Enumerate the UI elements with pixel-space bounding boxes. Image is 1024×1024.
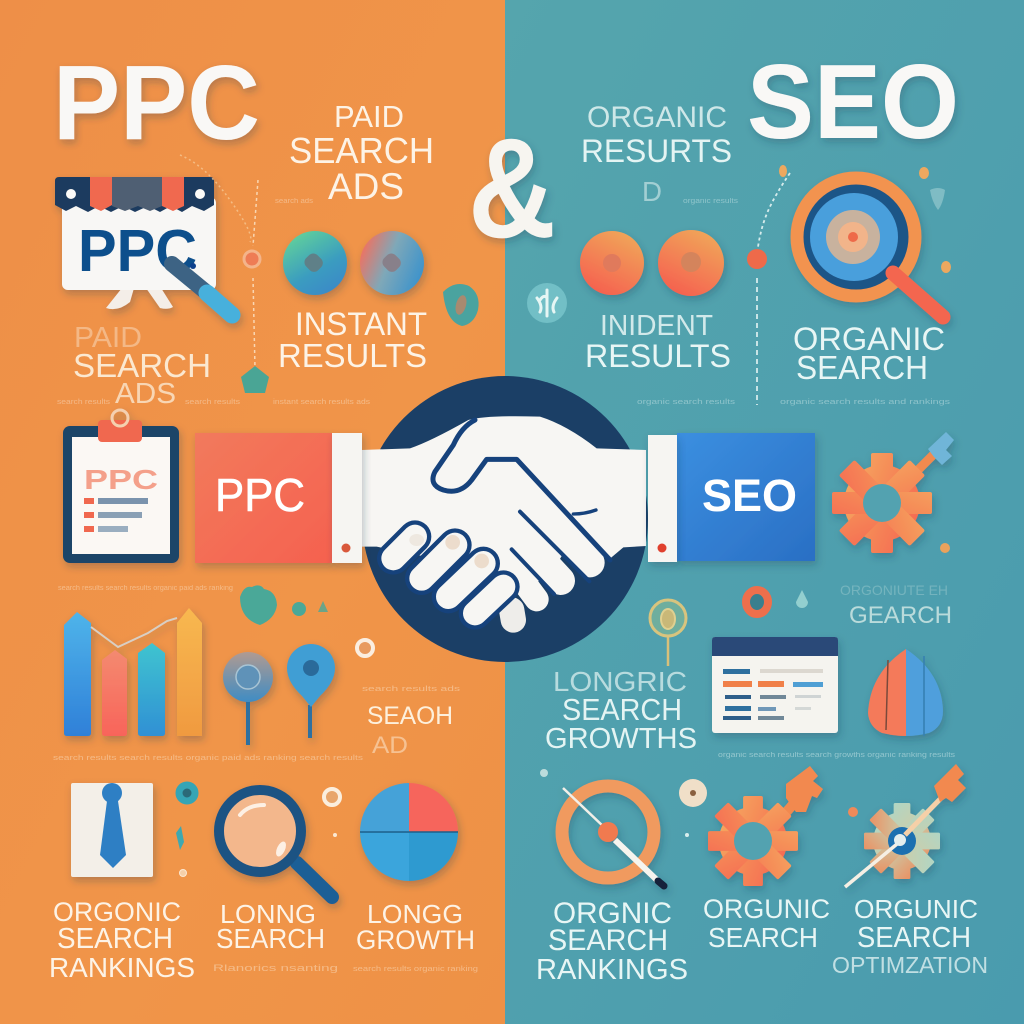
text: organic search faded right: ORGONIUTE EH (840, 582, 948, 598)
icon: small dot right (940, 543, 950, 553)
icon: tie card (71, 783, 153, 877)
icon: small accents left bottom (176, 826, 337, 876)
icon: multicolour circle (360, 231, 424, 295)
text: long organic growths: SEARCH (562, 692, 682, 727)
decoration: faint text rows left: search results organic ranking (353, 966, 478, 973)
icon: small ring left (357, 640, 373, 656)
text: long growth: GROWTH (356, 925, 475, 955)
icon: small target left (244, 251, 260, 267)
text: orgunic search: ORGUNIC (703, 894, 830, 924)
text: faint caption rows top: organic results (683, 198, 739, 205)
icon: small teal ring (179, 785, 195, 801)
text: organic search rankings right: RANKINGS (536, 954, 688, 986)
decoration: right dashed connector (757, 173, 790, 405)
text: faint caption rows top: organic search results and rankings (780, 399, 951, 406)
icon: gear key middle (708, 766, 823, 886)
icon: PPC billboard (55, 177, 232, 315)
text: incident results (585, 310, 731, 374)
icon: dial gauge (562, 786, 664, 886)
text: long organic growths: LONGRIC (553, 666, 687, 697)
text: instant results: RESULTS (278, 337, 427, 374)
text: organic search optimization (832, 894, 988, 978)
icon: small target right (747, 249, 767, 269)
icon: drop small (796, 590, 808, 608)
text: organic search rankings right: ORGNIC (553, 897, 672, 930)
text: paid search ads top: SEARCH (289, 130, 434, 171)
text: organic search optimization: ORGUNIC (854, 894, 978, 924)
text: long growth: LONGG (367, 899, 463, 929)
text: organic results top: RESURTS (581, 133, 732, 169)
text: organic search rankings right (536, 897, 688, 986)
decoration: faint divider right: organic search results search growths organic ranking results (718, 752, 956, 759)
title: SEO: SEO (747, 43, 959, 161)
icon: gear key right (845, 764, 966, 887)
text: faint caption rows top (57, 198, 951, 406)
icon: shield shape (868, 649, 943, 736)
icon: small accents top right (779, 165, 951, 273)
decoration: faint text rows left: search results search results organic paid ads ranking search results (53, 755, 364, 762)
icon: clipboard (63, 410, 179, 563)
text: long organic growths (545, 666, 697, 755)
icon: bar chart (64, 608, 202, 736)
text: organic search rankings right: SEARCH (548, 924, 668, 957)
text: long growth (356, 899, 475, 955)
text: paid search ads top: PAID (334, 99, 404, 134)
icon: small dots right bottom (540, 769, 858, 837)
text: instant results: INSTANT (295, 306, 427, 342)
text: faint caption rows top: search ads (275, 198, 314, 205)
icon: left cuff (332, 433, 362, 563)
text: faint caption rows top: search results (57, 399, 111, 406)
text: organic search rankings left: ORGONIC (53, 897, 181, 927)
text: organic search: ORGANIC (793, 321, 945, 357)
icon: small ring center (324, 789, 340, 805)
text: faint caption rows top: instant search results ads (273, 399, 371, 406)
text: orgunic search: SEARCH (708, 922, 818, 953)
text: paid search ads faded (73, 322, 211, 410)
icon: teal leaf left (443, 284, 479, 326)
icon: pin pair (223, 644, 335, 745)
icon: gear and wrench top right (832, 432, 954, 553)
icon: magnifier target (797, 178, 943, 317)
icon: small target mid (746, 590, 768, 614)
icon: SEO sleeve: SEO (702, 470, 797, 521)
text: paid search ads faded: SEARCH (73, 347, 211, 384)
panel: SEO teal background (505, 0, 1024, 1024)
decoration: faint text rows left: search results search results organic paid ads ranking (58, 585, 233, 592)
icon: small ring dial (679, 779, 707, 807)
text: organic search (793, 321, 945, 386)
text: organic search rankings left: RANKINGS (49, 952, 195, 983)
text: organic search rankings left: SEARCH (57, 923, 173, 955)
icon: gold pin right (650, 600, 686, 666)
text: instant results (278, 306, 427, 374)
text: search ads faded left: AD (372, 732, 408, 759)
text: paid search ads faded: PAID (74, 322, 142, 354)
icon: red circle right (580, 231, 644, 295)
text: faint caption rows top: organic search results (637, 399, 736, 406)
decoration: faint text rows left (53, 585, 478, 973)
icon: orange circle right (658, 230, 724, 296)
text: long search (216, 899, 325, 954)
text: organic search: SEARCH (796, 349, 928, 386)
icon: right cuff (648, 435, 677, 562)
icon: SEO sleeve (677, 433, 815, 561)
text: search ads faded left: SEAOH (367, 702, 453, 730)
icon: dashboard window (712, 637, 838, 733)
text: orgunic search (703, 894, 830, 953)
decoration: left dashed connector (180, 155, 258, 368)
icon: pie chart (360, 783, 458, 881)
text: organic search optimization: SEARCH (857, 922, 971, 954)
icon: PPC billboard: PPC (78, 218, 197, 284)
text: search ads faded left (367, 702, 453, 759)
icon: PPC sleeve: PPC (215, 469, 305, 521)
text: organic results top: ORGANIC (587, 101, 727, 134)
text: organic search faded right (840, 582, 952, 629)
text: paid search ads top: ADS (328, 166, 404, 207)
title: PPC: PPC (53, 44, 260, 162)
text: organic results top (581, 101, 732, 207)
icon: PPC sleeve (195, 433, 332, 563)
icon: small teal leaf (241, 366, 269, 393)
decoration: faint text rows left: search results ads (362, 686, 461, 693)
text: organic results top: D (642, 176, 662, 207)
text: paid search ads top (289, 99, 434, 207)
text: long search: LONNG (220, 899, 316, 929)
text: paid search ads faded: ADS (115, 378, 176, 410)
text: incident results: INIDENT (600, 310, 713, 342)
icon: clipboard: PPC (84, 464, 158, 495)
icon: handshake circle (362, 376, 648, 662)
panel: PPC orange background (0, 0, 505, 1024)
icon: handshake (362, 416, 646, 620)
text: organic search faded right: GEARCH (849, 602, 952, 629)
text: faint caption rows top: search results (185, 399, 241, 406)
text: incident results: RESULTS (585, 338, 731, 374)
title: ampersand: & (468, 109, 556, 268)
text: long search: SEARCH (216, 923, 325, 954)
icon: leaf plant left (240, 585, 328, 625)
icon: green circle (283, 231, 347, 295)
text: long organic growths: GROWTHS (545, 723, 697, 755)
icon: teal medallion right (527, 283, 567, 323)
icon: large magnifier (219, 790, 332, 897)
decoration: faint text rows left: Rlanorics nsanting (213, 963, 338, 973)
text: organic search optimization: OPTIMZATION (832, 952, 988, 978)
text: organic search rankings left (49, 897, 195, 983)
